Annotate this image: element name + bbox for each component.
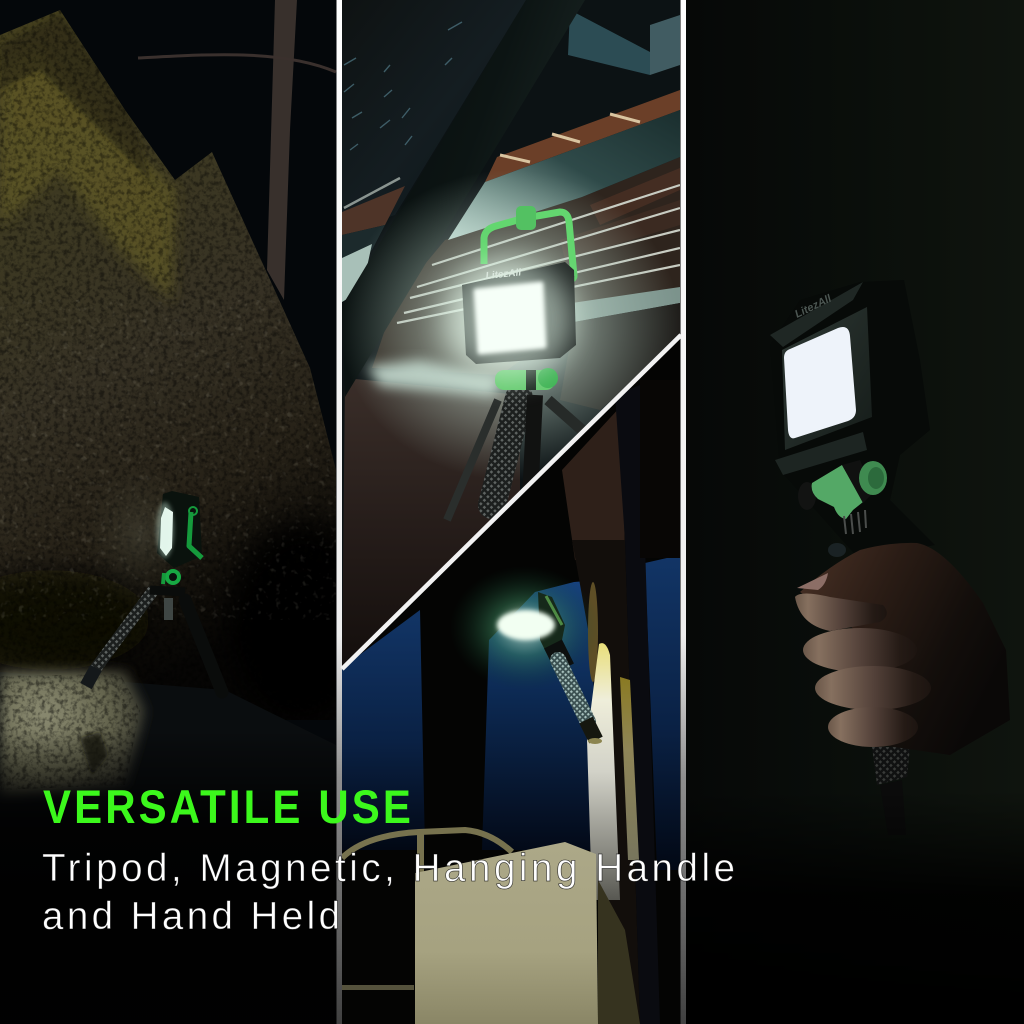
ground lit patch bbox=[0, 665, 155, 805]
gold sliver bbox=[588, 582, 598, 682]
box side shadow bbox=[598, 880, 640, 1024]
handle top bbox=[828, 543, 846, 557]
hand bbox=[795, 543, 1010, 755]
lamp lens bbox=[784, 327, 856, 438]
tree trunk bbox=[267, 0, 297, 300]
handle ring bbox=[574, 270, 578, 282]
ground ledge dark part bbox=[134, 683, 285, 720]
diagonal divider bbox=[342, 335, 681, 669]
blue post bbox=[615, 385, 660, 1024]
lamp glow bbox=[348, 180, 671, 472]
grip below hand bbox=[872, 747, 910, 785]
finger two bbox=[803, 628, 917, 672]
tripod legs bbox=[447, 395, 582, 520]
brand logo on hand held lamp: LitezAll bbox=[793, 292, 834, 321]
brick highlights bbox=[500, 114, 640, 162]
brown post upper bbox=[562, 405, 625, 560]
roof highlights bbox=[344, 22, 462, 150]
lens glow bbox=[445, 259, 573, 379]
second yellow pipe bbox=[620, 677, 639, 860]
ground flagstone bbox=[220, 686, 336, 840]
green hanging handle bbox=[484, 212, 574, 276]
lamp beam glow bbox=[450, 566, 600, 690]
lamp lens bbox=[476, 284, 544, 352]
lamp top bezel bbox=[770, 282, 863, 347]
panel: tripod photo on rock bbox=[0, 0, 336, 800]
icon: lamp glow on rock bbox=[110, 495, 164, 580]
index finger bbox=[795, 594, 887, 631]
lamp lit face bbox=[497, 610, 555, 640]
brick band bbox=[485, 90, 680, 182]
teal light band bbox=[448, 110, 680, 240]
black beam bbox=[342, 0, 585, 397]
rock face bbox=[0, 10, 336, 720]
dark side post bbox=[640, 380, 680, 558]
left sky bbox=[342, 610, 425, 850]
panel: hand held photo bbox=[686, 0, 1024, 1024]
thumb nail bbox=[797, 573, 828, 590]
coil neck bbox=[844, 510, 866, 534]
vertical divider left bbox=[336, 0, 342, 1024]
finger three bbox=[815, 666, 931, 710]
bottom shade bbox=[686, 790, 1024, 1024]
subheading line 2: and Hand Held bbox=[42, 895, 340, 938]
ceiling bricks bbox=[372, 157, 680, 375]
left white strip bbox=[342, 244, 372, 302]
lamp rear shadow bbox=[770, 280, 935, 560]
centre sky bbox=[482, 580, 600, 850]
finger four bbox=[828, 707, 918, 747]
roof edge strip bbox=[344, 178, 400, 208]
yellow pipe bbox=[587, 643, 620, 900]
green swivel connector bbox=[798, 460, 887, 519]
icon: tripod lamp bbox=[86, 491, 222, 692]
lower bezel bbox=[775, 432, 867, 475]
lower left rail bbox=[342, 985, 414, 990]
brand logo on lamp: LitezAll bbox=[485, 267, 522, 282]
pale rail bbox=[342, 830, 512, 858]
upper right structure bbox=[568, 10, 650, 75]
green connector bbox=[495, 368, 558, 390]
post lower bbox=[572, 540, 640, 1024]
subheading line 1: Tripod, Magnetic, Hanging Handle bbox=[42, 847, 735, 890]
lower handle bbox=[880, 780, 906, 835]
cream box bbox=[415, 842, 598, 1024]
roof sheet bbox=[342, 0, 526, 232]
right sky bbox=[645, 555, 680, 870]
wall bbox=[342, 378, 520, 670]
heading: VERSATILE USE bbox=[43, 780, 414, 833]
branch bbox=[138, 55, 336, 72]
handle clamp bbox=[516, 206, 536, 230]
panel: magnetic mount photo on post bbox=[342, 330, 680, 1024]
vertical divider right bbox=[680, 0, 686, 1024]
lamp body bbox=[462, 262, 576, 364]
panel: hanging handle photo under ceiling bbox=[340, 0, 680, 670]
underside bricks left bbox=[342, 186, 405, 235]
second light band bbox=[572, 287, 680, 322]
bright band bbox=[367, 360, 500, 396]
bottom shade bbox=[0, 730, 337, 1024]
ceiling slats bbox=[397, 185, 680, 323]
upper right block bbox=[650, 15, 680, 75]
rail upright bbox=[417, 832, 424, 872]
magnetic lamp head and handle bbox=[538, 592, 602, 744]
lens frame bbox=[782, 307, 872, 450]
back of hand bbox=[800, 543, 1010, 755]
